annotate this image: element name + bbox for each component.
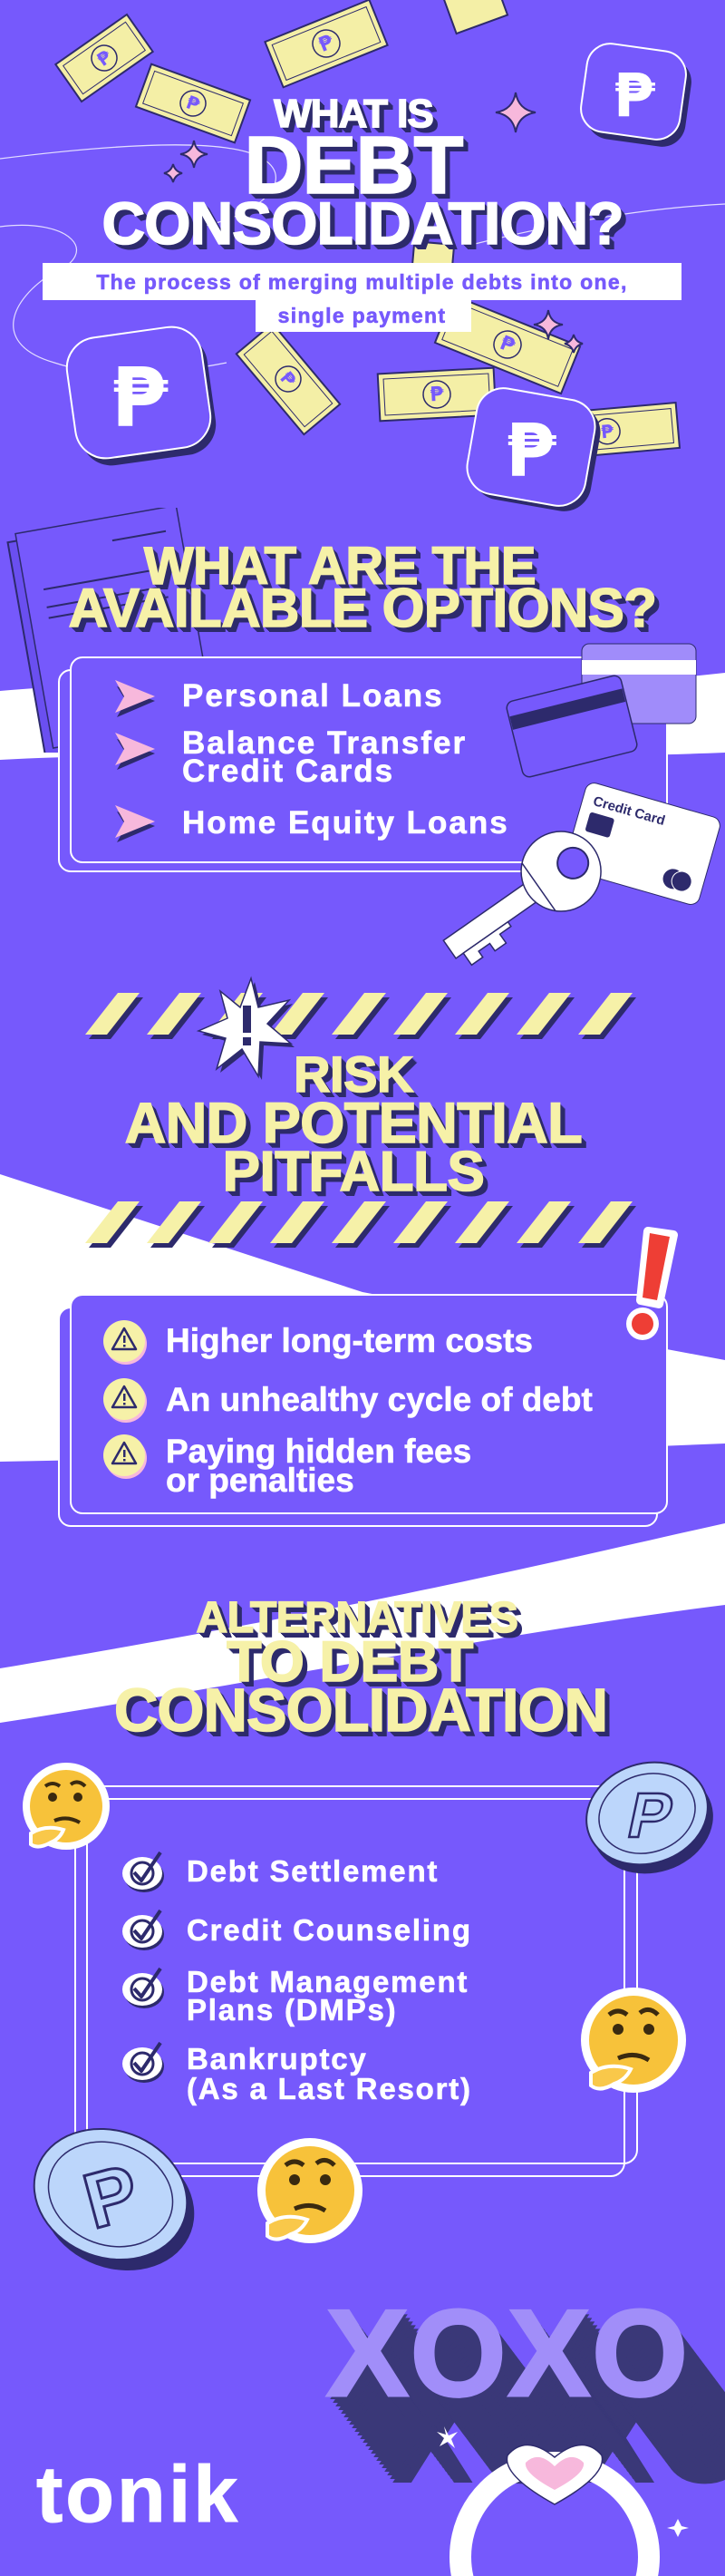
subtitle: single payment (278, 304, 446, 327)
heading: alternatives (114, 1594, 609, 1745)
money bills: ₱ (276, 367, 301, 391)
logo: tonik: tonik (36, 2449, 240, 2539)
risk panel back frame (58, 1307, 658, 1527)
alt: debt management plans (187, 1965, 469, 2027)
key (427, 816, 616, 982)
title: what is debt consolidation (102, 92, 626, 257)
white band 3 (0, 1523, 725, 1723)
peso coins (octagonal badges): ₱ (111, 351, 169, 446)
panel: alternatives (86, 1785, 638, 2164)
money bills: ₱ (183, 91, 203, 116)
subtitle (43, 263, 682, 332)
heading: alternatives: CONSOLIDATION (114, 1677, 607, 1745)
money bills: ₱ (430, 384, 445, 406)
icon: thinking emoji bottom (257, 2138, 362, 2243)
white band 1 (0, 673, 725, 760)
title: what is debt consolidation: WHAT IS (274, 92, 433, 136)
warning stripes bottom (85, 1201, 636, 1248)
money bills (54, 0, 681, 456)
arrow icon 1 (115, 680, 155, 717)
check icon 2 (122, 1910, 164, 1950)
option: balance transfer: Balance Transfer (182, 725, 467, 761)
heading: alternatives: ALTERNATIVES (197, 1594, 517, 1642)
peso coins (octagonal badges): ₱ (614, 61, 655, 131)
alt: bankruptcy: (As a Last Resort) (187, 2072, 472, 2105)
check icon 1 (122, 1852, 164, 1892)
heading: what are the available options: WHAT ARE THE (144, 537, 536, 596)
heading: risk and potential pitfalls (125, 1045, 586, 1203)
peso coins (octagonal badges) (65, 43, 691, 511)
credit cards and key illustration (442, 644, 720, 967)
options panel back frame (58, 669, 658, 872)
icon: red exclamation (626, 1227, 678, 1340)
subtitle: The process of merging multiple debts into one, (96, 270, 628, 294)
risk: hidden fees (166, 1433, 471, 1499)
document illustration (6, 508, 203, 753)
icon: starburst exclamation (196, 976, 295, 1080)
heading: risk and potential pitfalls: RISK (294, 1045, 413, 1103)
white credit card: Credit Card (592, 793, 667, 829)
risk: higher long-term costs: Higher long-term costs (166, 1322, 533, 1359)
thin swirl lines (0, 145, 276, 227)
alternatives frame back (74, 1798, 625, 2177)
money bills: ₱ (600, 420, 614, 442)
sparkles (163, 92, 584, 354)
money bills: ₱ (92, 45, 116, 71)
title: what is debt consolidation: DEBT (245, 121, 462, 211)
panel: risks (70, 1294, 668, 1514)
peso coins (octagonal badges): ₱ (506, 409, 556, 493)
icon: coin top-right: P (622, 1780, 680, 1851)
alt: bankruptcy: Bankruptcy (187, 2042, 368, 2075)
title: what is debt consolidation: CONSOLIDATION? (102, 190, 624, 257)
heading: alternatives: TO DEBT (227, 1630, 473, 1694)
risk: unhealthy cycle: An unhealthy cycle of debt (166, 1381, 593, 1418)
icon: thinking emoji right (581, 1988, 686, 2093)
alt: debt management plans: Debt Management (187, 1965, 469, 1998)
heading: risk and potential pitfalls: AND POTENTIAL (125, 1092, 582, 1155)
option: personal loans: Personal Loans (182, 678, 444, 714)
panel: options (70, 656, 668, 863)
alt: credit counseling: Credit Counseling (187, 1913, 472, 1947)
warning icon 1 (103, 1320, 147, 1365)
icon: coin bottom-left (33, 2128, 194, 2270)
alt: debt management plans: Plans (DMPs) (187, 1993, 397, 2027)
warning icon 2 (103, 1378, 147, 1423)
heading: what are the available options: AVAILABLE OPTIONS? (69, 578, 656, 638)
xoxo sign-off: XOXO (326, 2284, 690, 2422)
arrow icon 2 (115, 733, 155, 770)
alt: bankruptcy (187, 2042, 472, 2105)
alt: debt settlement: Debt Settlement (187, 1854, 439, 1888)
risk: hidden fees: or penalties (166, 1462, 354, 1499)
icon: coin top-right (585, 1761, 713, 1873)
option: balance transfer: Credit Cards (182, 753, 394, 789)
light card (582, 644, 696, 724)
white credit card (563, 781, 722, 907)
money bills: ₱ (315, 31, 338, 57)
risk: hidden fees: Paying hidden fees (166, 1433, 471, 1470)
icon: coin bottom-left: P (75, 2148, 148, 2246)
striped card (506, 675, 638, 778)
warning stripes top (85, 993, 636, 1039)
icon: thinking emoji top-left (23, 1763, 110, 1850)
icon: heart hands ring (437, 2426, 689, 2576)
option: home equity: Home Equity Loans (182, 805, 509, 841)
check icon 4 (122, 2042, 164, 2083)
warning icon 3 (103, 1434, 147, 1479)
heading: risk and potential pitfalls: PITFALLS (223, 1141, 484, 1203)
money bills: ₱ (497, 332, 518, 358)
arrow icon 3 (115, 805, 155, 842)
white band 2 (0, 1174, 725, 1462)
option: balance transfer (182, 725, 467, 789)
heading: what are the available options (69, 537, 660, 638)
check icon 3 (122, 1968, 164, 2008)
